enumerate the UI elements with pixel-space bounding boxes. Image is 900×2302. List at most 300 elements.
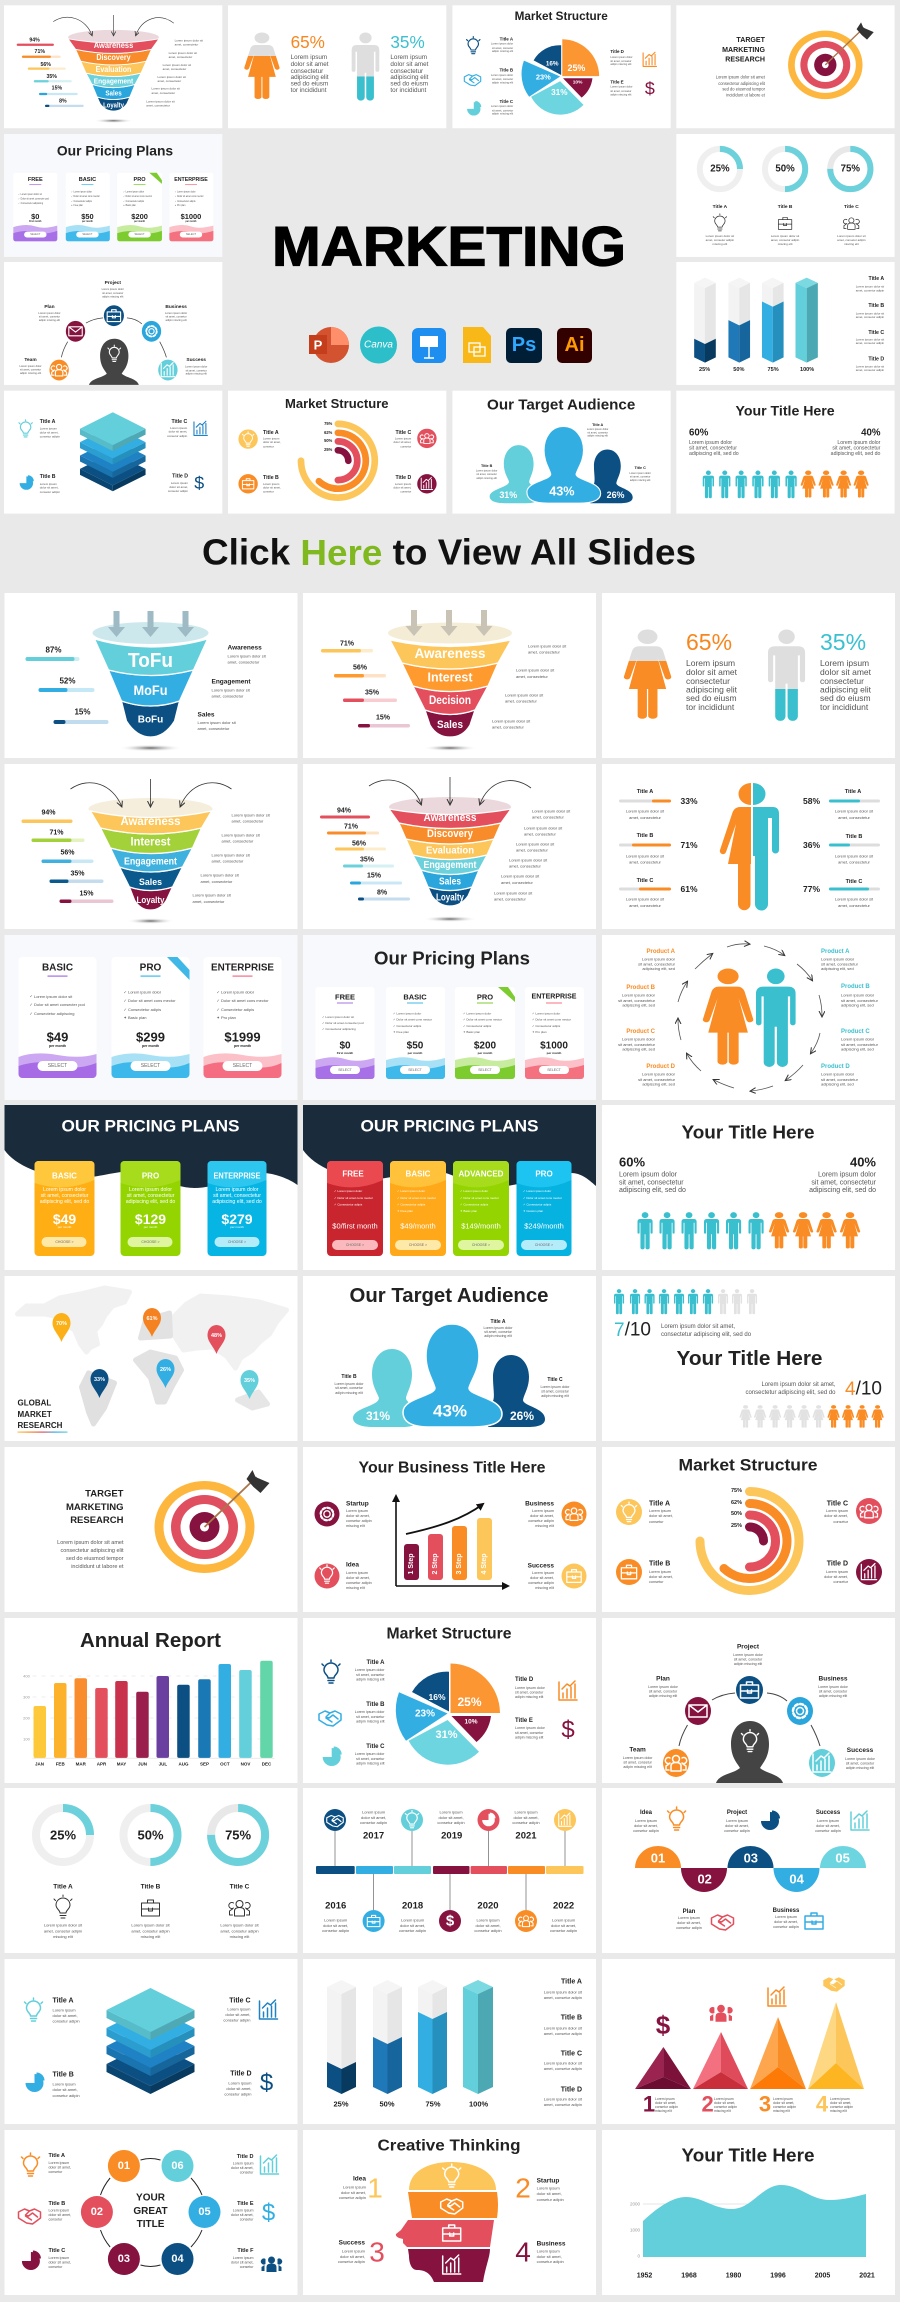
card: advanced: ✓ Dolor sit amet cons mector [460,1196,499,1200]
card: advanced: ✦ Basic plan [460,1209,478,1213]
labels: Title D [230,2070,252,2078]
pyramid icons [656,1977,845,2040]
funnel labels: amet, consectetur [509,863,541,868]
labels: adipin miscing elit [623,1765,652,1769]
panel: tofu funnel [4,593,298,758]
right labels: Lorem ipsum dolor [821,956,854,962]
years and captions bottom: dolor sit amet, [551,1922,576,1928]
map pins: 26% [160,1367,171,1373]
funnel labels: amet, consectetur [212,858,244,863]
center title: YOUR [136,2192,165,2204]
head icons [441,2164,463,2274]
icons [319,1660,577,1766]
target rings [154,1481,254,1573]
card: basic: BASIC [406,1170,431,1178]
left stats: Title C [637,878,653,884]
bottom labels: Lorem ipsum [775,1915,797,1919]
card: enterprise: ENTERPRISE [214,1172,261,1180]
heading: RESEARCH [70,1514,124,1526]
thumbnail: target [676,5,895,128]
bar labels: 25% [333,2100,349,2108]
left labels: Lorem ipsum dolor [622,1036,655,1042]
right stats: amet, consectetur [838,902,871,908]
funnel labels: amet, consectetur [228,659,260,664]
pie chart: 23% [415,1708,435,1720]
thumbnail: people [228,5,446,128]
left labels [48,2153,71,2269]
text block left: sed do eiusm [686,693,737,703]
left labels: adipiscing elit, sed [622,1002,655,1007]
percentage bars: 15% [79,890,94,898]
top labels: dolor sit amet, [816,1824,840,1828]
numbered labels: dolor sit amet, [341,2190,366,2194]
column: title a: Lorem ipsum dolor sit [44,1922,82,1928]
labels: consetur [833,1520,849,1524]
funnel arrows [108,611,194,637]
labels: adipin miscing elit [734,1662,762,1666]
panel: five stage funnel: Sales [139,877,162,888]
card: enterprise: ✓ Consectetur adipis [216,1006,254,1012]
numbered labels: dolor sit amet, [537,2190,562,2196]
card: enterprise: ✦ Pro plan [532,1030,547,1034]
funnel labels: Lorem ipsum dolor sit [509,858,547,862]
panel: layers [4,1959,298,2124]
percentage bars: 56% [60,850,75,856]
left labels: dolor sit amet, [48,2213,71,2217]
right stats: 77% [803,884,820,894]
left labels: dolor sit amet, [48,2166,71,2170]
left stats: 61% [680,884,698,894]
icon: illustrator: Ai [564,334,584,356]
bar chart [23,1661,274,1766]
labels: Lorem ipsum [649,1509,671,1513]
step chart: 3 Step [456,1553,463,1575]
panel: 7 of 10 [602,1276,895,1441]
bust: center [403,1324,502,1427]
numbered labels: Lorem ipsum [537,2248,560,2254]
numbers and captions: 1 [643,2092,655,2116]
card: basic: per month [49,1044,66,1048]
labels: Title C [827,1500,848,1508]
thumbnail: pricing [4,134,222,257]
icon: photoshop: Ps [512,334,536,356]
woman figure [703,968,753,1065]
right labels: Title A [561,1978,582,1986]
numbered labels: Startup [537,2178,559,2184]
card: free [327,1161,383,1256]
labels: Lorem ipsum dolor [818,1685,848,1689]
funnel labels: Lorem ipsum dolor sit [492,718,530,724]
labels [52,1998,252,2098]
card: pro: ✓ Consectetur adipis [523,1202,552,1206]
right labels: Product A [821,949,850,955]
labels left [346,1500,372,1590]
labels: dolor sit amet, [649,1575,673,1579]
thumbnail: donuts [676,134,895,257]
bottom labels: Business [773,1908,800,1914]
panel: target audience: 43% [433,1402,467,1420]
card: pro: ✓ Consectetur adipis [124,1006,161,1012]
card: basic: ✓ Lorem ipsum dolor [397,1189,425,1193]
numbered labels: consetur adipin [339,2194,366,2200]
labels left: Lorem ipsum [346,1509,368,1513]
circle: startup [314,1502,340,1526]
card: advanced: ADVANCED [458,1170,504,1178]
woman figure [624,629,671,719]
connectors [679,1693,820,1746]
card: enterprise: ✓ Dolor sit amet cons mector [216,998,269,1002]
numbered labels: 3 [369,2236,385,2268]
radial arcs [700,1492,799,1590]
thumbnail: project arc [4,262,222,385]
funnel labels: amet, consectetur [222,838,254,843]
left labels: dolor sit amet, [48,2260,71,2264]
right stats: Lorem ipsum dolor sit [835,854,873,858]
panel: tofu funnel: BoFu [138,714,163,726]
right labels: consetur [240,2265,254,2269]
right labels: Lorem ipsum dolor sit [544,2026,582,2030]
right labels: Lorem ipsum dolor [841,1036,874,1042]
text block left: adipiscing elit [686,684,738,694]
panel: tofu funnel: MoFu [134,682,168,698]
card: pro [516,1161,572,1256]
left stats: Lorem ipsum dolor sit [626,854,664,858]
arrow [204,1470,270,1527]
right labels: adipin miscing elit [515,1736,543,1740]
area chart: 0 [637,2254,640,2258]
x axis labels: 2005 [815,2272,830,2280]
labels: sit amet, consetur [649,1690,678,1694]
top labels: consetur adipin [633,1829,659,1833]
numbered labels: dolor sit amet, [340,2254,365,2258]
numbered labels: dolor sit amet, [537,2254,562,2258]
labels: Lorem ipsum [826,1509,848,1513]
card: free: CHOOSE > [346,1243,364,1247]
top labels: consetur adipin [815,1829,841,1833]
card: basic [390,1161,446,1256]
arc labels: 25% [731,1523,742,1529]
column: title b: amet, consetur adipin [131,1928,170,1933]
panel: dark pricing four plans [303,1105,596,1270]
bottom labels [676,1908,823,1930]
left labels: sit amet, consetur [356,1757,385,1761]
percentage bars: 15% [74,708,91,716]
left labels: adipiscing elit, sed [622,1046,655,1051]
step chart: 2 Step [432,1553,439,1575]
labels left: consetur adipin [346,1519,372,1523]
right stats: Lorem ipsum dolor sit [835,808,873,814]
curved arrows [70,779,232,806]
center title: TITLE [137,2218,165,2230]
years and captions bottom: Lorem ipsum [401,1918,424,1922]
icon: powerpoint [309,327,349,363]
card: pro: ✓ Dolor sit amet cons mector [523,1196,562,1200]
heading: marketing: MARKETING [272,214,626,278]
numbered labels: Idea [353,2176,366,2182]
card: basic: ✓ Consectetur adipis [393,1024,422,1028]
card: advanced: ✓ Consectetur adipis [460,1202,489,1206]
funnel labels: Lorem ipsum dolor sit [516,668,554,672]
card: enterprise: sit amet, consectetur [213,1193,261,1199]
funnel layers [389,809,511,906]
funnel labels: Lorem ipsum dolor sit [200,872,239,878]
card: pro: Lorem ipsum dolor [129,1187,172,1193]
map title: GLOBAL [18,1398,51,1408]
column: title a: Title A [53,1884,73,1890]
left stats: Title A [637,789,653,795]
text block right: dolor sit amet [820,667,872,677]
bust: left [353,1349,421,1427]
percentage bars: 71% [49,830,64,836]
card: free: ✓ Dolor sit amet cons mector [334,1196,373,1200]
text block left: dolor sit amet [686,667,738,677]
bottom nodes [363,1910,537,1932]
map pins [52,1308,258,1399]
card: basic: ✓ Consectetur adipiscing [30,1010,74,1016]
labels: Lorem ipsum [52,2008,76,2012]
left labels: sit amet, consetur [356,1673,385,1677]
panel: business steps chart [303,1447,596,1612]
labels: dolor sit amet, [649,1514,673,1518]
column: title b: Title B [141,1884,161,1890]
numbered labels: Lorem ipsum [342,2248,365,2254]
labels: adipin miscing elit [541,1394,569,1398]
card: advanced: $149/month [461,1222,501,1230]
right labels: amet, consetur adipin [544,1994,582,2000]
left labels: Lorem ipsum [48,2161,69,2165]
icon: photoshop [506,328,542,363]
map pins: 35% [244,1378,255,1384]
panel: area chart [602,2130,895,2295]
left labels: sit amet, consectetur [618,1042,656,1046]
left labels: sit amet, consetur [356,1715,385,1719]
arc labels: 50% [731,1511,742,1517]
years and captions bottom: Lorem ipsum [552,1918,575,1922]
semicircle steps [635,1846,866,1892]
bar chart: JUL [159,1762,167,1766]
years and captions bottom: consetur adipin [550,1928,577,1932]
left labels: Lorem ipsum dolor [355,1752,384,1756]
thumbnail: layers [4,391,222,514]
funnel labels: amet, consectetur [492,724,524,729]
numbers and captions: consetur adipin [773,2105,796,2109]
right labels: consetur [240,2218,254,2222]
top people row [614,1289,757,1314]
labels: adipin miscing elit [846,1766,874,1770]
panel: six stage funnel: Evaluation [426,844,474,856]
right labels: Title F [237,2248,254,2254]
call to action heading: Click Here to View All Slides [202,532,696,572]
arc labels [731,1488,742,1529]
right labels: Title D [237,2154,254,2160]
percentage bars [320,808,410,900]
years and captions top: dolor sit amet, [438,1814,464,1820]
right labels: Lorem ipsum dolor [515,1726,545,1730]
labels: sit amet, consetur [335,1386,364,1390]
step chart: 1 Step [408,1553,415,1575]
circle: title b [616,1559,642,1585]
icon: google slides [463,327,491,363]
icon: illustrator [557,328,592,363]
card: free: ✓ Consectetur adipiscing [322,1027,356,1031]
donut: 75% [211,1808,265,1862]
labels right: consetur adipin [528,1581,554,1585]
panel: five stage funnel: Engagement [124,856,178,868]
years and captions bottom: 2018 [402,1900,423,1912]
text block left: tor incididunt [686,702,735,712]
title: OUR PRICING PLANS [360,1116,538,1136]
labels: Title B [649,1560,670,1568]
panel: six stage funnel [303,764,596,929]
percentage bars: 71% [344,824,359,830]
panel: five stage funnel: Awareness [120,816,180,828]
app icons row [309,326,592,364]
left labels: adipin miscing elit [356,1720,384,1724]
x axis labels: 1952 [637,2272,652,2280]
icons: $ [262,2200,275,2226]
panel: half man half woman [602,764,895,929]
labels: dolor sit amet, [52,2012,78,2018]
funnel labels: Lorem ipsum dolor sit [516,842,554,846]
numbers and captions: 2 [701,2092,714,2116]
card: pro: $200 [474,1040,497,1052]
card: basic: $49 [47,1030,68,1044]
right labels: dolor sit amet, [231,2166,254,2170]
numbered labels: Success [339,2240,365,2246]
panel: six stage funnel: Loyalty [436,892,464,904]
bar chart: JUN [138,1762,147,1766]
text block right: sit amet, consectetur [811,1179,877,1186]
curved arrows [369,777,531,804]
labels right: dolor sit amet, [530,1576,554,1580]
bar chart: AUG [178,1762,189,1766]
right labels: sit amet, consectetur [821,1076,859,1082]
left stats: amet, consectetur [629,902,662,908]
labels: sit amet, consetur [623,1760,653,1764]
left labels: Lorem ipsum dolor [622,992,655,998]
right stats: Title B [846,834,862,840]
panel: great title cycle [4,2130,298,2295]
percentage bars: 15% [367,872,382,880]
years and captions bottom: Lorem ipsum [324,1918,347,1922]
panel: target marketing research [4,1447,298,1612]
labels [623,1644,876,1770]
left labels [618,949,676,1086]
funnel labels: amet, consectetur [212,693,244,698]
right stats: 36% [803,840,820,850]
card: enterprise: SELECT [547,1068,562,1072]
right labels: adipiscing elit, sed [841,1046,874,1051]
labels: sit amet, consetur [846,1762,875,1766]
text block: sed do eiusmod tempor [66,1556,124,1562]
left labels: Lorem ipsum dolor [355,1710,384,1714]
pyramid 3 [750,2017,806,2089]
bar chart: JAN [35,1762,44,1766]
panel: annual report [4,1618,298,1783]
funnel labels: Lorem ipsum dolor sit [198,720,236,725]
card: basic: ✦ Free plan [393,1030,409,1034]
cycle nodes: 06 [171,2160,184,2172]
layer stack [106,1988,194,2094]
labels: Success [847,1747,874,1754]
panel: awareness funnel: Decision [429,695,471,707]
node: project [736,1676,763,1704]
percentage bars: 56% [352,840,367,848]
card: pro: PRO [477,992,493,1002]
right labels: adipin miscing elit [515,1695,543,1699]
arc labels: 75% [731,1488,742,1494]
circle: title c [856,1498,882,1524]
years and captions bottom: 2020 [477,1900,499,1912]
card: free: $0/first month [332,1222,378,1230]
left labels: Title B [48,2201,65,2207]
center title: GREAT [133,2206,168,2216]
title: OUR PRICING PLANS [62,1116,240,1136]
pie chart [396,1664,500,1765]
right labels: Lorem ipsum [233,2256,254,2260]
man figure [756,968,796,1067]
numbers and captions: dolor sit amet, [714,2101,735,2105]
years and captions bottom [322,1900,577,1932]
bar chart: 400 [23,1674,31,1678]
stat: 4 of 10: 4/10 [845,1378,882,1400]
panel: dark pricing three plans [4,1105,298,1270]
labels right: Success [528,1562,554,1570]
panel: market structure pie [303,1618,596,1783]
map title: MARKET [18,1410,52,1418]
card: pro: per month [478,1051,492,1055]
labels left: Startup [346,1500,369,1508]
right labels: adipiscing elit, sed [841,1002,874,1007]
percentage bars: 35% [365,690,380,696]
card: enterprise: $1000 [540,1040,568,1052]
bust: right [488,1355,545,1427]
card: free: ✓ Lorem ipsum dolor sit [322,1015,354,1019]
panel: 60 40 people [602,1105,895,1270]
card: pro: PRO [140,962,162,974]
labels right: consetur adipin [528,1519,554,1523]
card: pro: CHOOSE > [141,1240,160,1244]
years and captions top: consetur adipin [512,1820,540,1824]
years and captions bottom: 2016 [325,1900,346,1912]
labels: Lorem ipsum [826,1570,848,1574]
card: basic: ✓ Dolor sit amet cons mector [393,1018,432,1022]
numbers and captions: 3 [759,2092,771,2116]
semicircle steps: 02 [697,1872,712,1886]
labels: adipin miscing elit [484,1334,512,1338]
labels: dolor sit amet, [52,2086,78,2092]
man figure [768,629,805,721]
card: pro: sit amet, consectetur [127,1193,175,1199]
column: title b: miscing elit [141,1934,161,1938]
funnel labels: amet, consectetur [232,818,264,823]
funnel labels: Lorem ipsum dolor sit [524,826,562,830]
years and captions top [360,1810,540,1842]
top labels: Lorem ipsum [726,1819,748,1823]
heading: TARGET [85,1488,124,1500]
numbers and captions: miscing elit [830,2109,847,2113]
left stats [619,789,698,908]
stat: 40%: 40% [850,1154,876,1170]
percentage bars: 94% [41,810,56,816]
labels: dolor sit amet, [225,2012,250,2016]
numbered labels: Lorem ipsum [537,2186,560,2190]
right labels: dolor sit amet, [231,2260,254,2264]
funnel labels: amet, consectetur [528,649,560,654]
labels: Business [819,1676,848,1682]
panel: six stage funnel: Sales [439,876,461,888]
funnel labels: amet, consectetur [501,880,533,884]
